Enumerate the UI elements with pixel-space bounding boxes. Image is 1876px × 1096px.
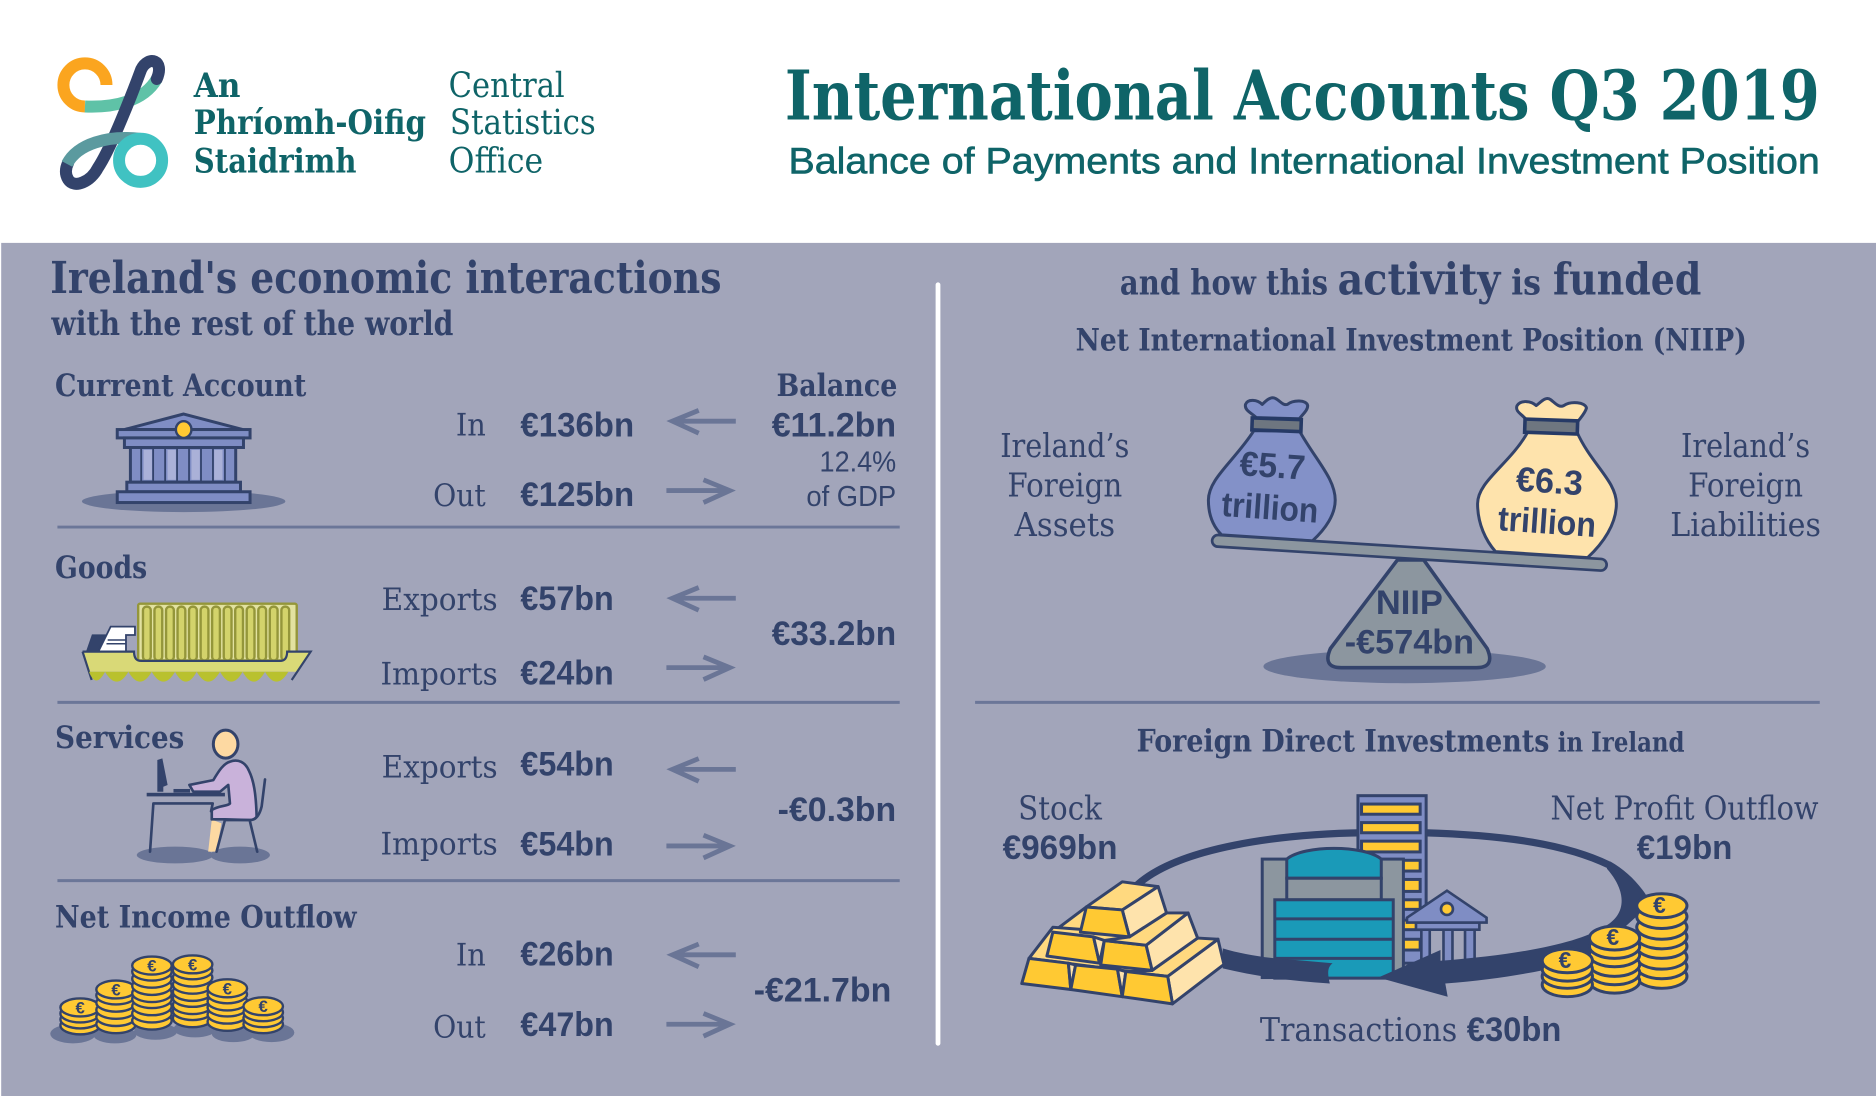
flow: imports: €54bn <box>520 826 614 864</box>
scale shadow <box>1263 650 1546 683</box>
icon: liabilities money bag <box>1478 399 1616 558</box>
flow: exports: Exports <box>382 750 498 786</box>
logo text: English name: Central <box>449 66 565 106</box>
icon: coin stacks: € <box>75 998 85 1017</box>
icon: container ship <box>83 604 311 682</box>
flow: exports <box>382 745 736 786</box>
flow: exports: Exports <box>382 582 498 618</box>
icon: tower <box>1358 796 1426 963</box>
flow: out: €125bn <box>520 476 634 514</box>
logo text: English name: Statistics <box>450 103 596 143</box>
heading: left panel: with the rest of the world <box>51 304 453 343</box>
flow: out: Out <box>433 478 486 514</box>
balance value: 12.4% <box>820 446 896 478</box>
balance value: of GDP <box>806 481 896 513</box>
icon: coin stacks: € <box>188 955 198 974</box>
label: foreign assets: Ireland’s <box>1000 427 1129 465</box>
icon: assets money bag: €5.7 <box>1238 445 1307 488</box>
ring arrow top <box>1137 833 1609 885</box>
icon: coin stacks: € <box>147 957 157 976</box>
balance value: €33.2bn <box>772 615 896 653</box>
icon: fulcrum with NIIP <box>1328 560 1490 668</box>
panel: services <box>55 720 896 864</box>
icon: knot mark <box>63 61 162 184</box>
heading: right panel: and how this <box>1120 262 1328 303</box>
icon: bank <box>82 414 285 512</box>
icon: coin stacks: € <box>223 979 233 998</box>
balance value: -€21.7bn <box>754 971 891 1009</box>
flow: out <box>433 1006 730 1045</box>
label: transactions: Transactions <box>1260 1011 1457 1049</box>
logo text: Irish name: Staidrimh <box>194 141 357 180</box>
icon: fulcrum with NIIP: NIIP <box>1376 584 1443 622</box>
flow: exports <box>382 580 736 618</box>
panel: net income outflow <box>50 899 891 1045</box>
icon: main building <box>1262 848 1403 978</box>
icon: liabilities money bag: trillion <box>1497 500 1597 545</box>
logo: Central Statistics Office <box>63 61 596 184</box>
balance value <box>772 407 896 513</box>
balance value: -€0.3bn <box>778 791 896 829</box>
panel: current account <box>55 368 897 514</box>
flow: in: In <box>456 408 486 444</box>
icon: coin stacks: € <box>259 997 269 1016</box>
flow: in <box>456 407 736 445</box>
label: foreign liabilities: Liabilities <box>1670 506 1821 544</box>
chart: FDI cycle <box>1022 796 1687 1004</box>
heading: current account: Current Account <box>55 368 307 404</box>
logo text: English name: Office <box>449 141 543 181</box>
heading: goods: Goods <box>55 550 147 586</box>
arrow: tail <box>1223 948 1333 984</box>
flow: imports: Imports <box>380 656 498 692</box>
heading: balance: Balance <box>776 368 897 404</box>
icon: liabilities money bag: €6.3 <box>1515 461 1584 503</box>
logo text: Irish name: Phríomh-Oifig <box>194 103 426 142</box>
flow: out: €47bn <box>520 1006 614 1044</box>
logo text: Irish name: An <box>193 66 240 105</box>
label: foreign assets: Foreign <box>1007 467 1122 505</box>
logo text: Irish name <box>193 66 426 180</box>
label: foreign assets: Assets <box>1014 506 1115 544</box>
icon: coin stacks <box>1542 892 1687 997</box>
heading: left panel <box>50 252 721 343</box>
heading: NIIP: Net International Investment Position (NIIP) <box>1076 323 1747 359</box>
icon: coin stacks: € <box>111 980 121 999</box>
icon: small bank <box>1407 891 1487 963</box>
heading: net income outflow: Net Income Outflow <box>55 899 358 935</box>
heading: right panel <box>1120 253 1701 305</box>
label: foreign liabilities: Ireland’s <box>1681 427 1810 465</box>
logo text: English name <box>449 66 596 181</box>
label: net profit outflow: €19bn <box>1637 829 1732 867</box>
balance value: €11.2bn <box>772 407 896 445</box>
flow: exports: €54bn <box>520 745 614 783</box>
heading: right panel: activity <box>1338 253 1501 305</box>
heading: right panel: is <box>1511 262 1541 303</box>
flow: out: Out <box>433 1009 486 1045</box>
icon: fulcrum with NIIP: -€574bn <box>1345 623 1474 661</box>
label: transactions: €30bn <box>1467 1011 1561 1049</box>
flow: in: In <box>456 938 486 974</box>
icon: coin stacks: € <box>1606 924 1619 950</box>
label: foreign liabilities <box>1670 427 1821 544</box>
heading: right panel: funded <box>1553 253 1701 305</box>
heading: left panel: Ireland's economic interactions <box>50 252 721 304</box>
vertical divider <box>936 285 940 1043</box>
icon: coin stacks <box>50 955 294 1043</box>
heading: foreign direct investments: in Ireland <box>1558 726 1685 758</box>
flow: in <box>456 936 736 974</box>
panel: goods <box>55 550 896 692</box>
flow: imports <box>380 654 730 692</box>
label: foreign liabilities: Foreign <box>1688 467 1803 505</box>
flow: imports: €24bn <box>520 654 614 692</box>
icon: coin stacks: € <box>1653 892 1666 918</box>
flow: in: €26bn <box>520 936 614 974</box>
icon: assets money bag: trillion <box>1220 486 1320 531</box>
icon: scale beam <box>1218 541 1601 565</box>
icon: coin stacks: € <box>1559 947 1572 973</box>
label: net profit outflow: Net Profit Outflow <box>1551 790 1819 828</box>
chart: NIIP balance scale <box>1208 398 1616 683</box>
label: foreign assets <box>1000 427 1129 544</box>
icon: gold bars <box>1022 882 1224 1004</box>
label: stock: Stock <box>1018 790 1102 828</box>
flow: imports: Imports <box>380 826 498 862</box>
flow: in: €136bn <box>520 407 634 445</box>
icon: assets money bag <box>1208 398 1335 541</box>
label: net profit outflow <box>1551 790 1819 867</box>
heading: services: Services <box>55 720 184 756</box>
flow: imports <box>380 826 730 864</box>
flow: exports: €57bn <box>520 580 614 618</box>
icon: person at desk <box>137 730 270 863</box>
flow: out <box>433 476 730 514</box>
subtitle: Balance of Payments and International Investment Position <box>788 139 1820 181</box>
heading: foreign direct investments: Foreign Direct Investments <box>1137 723 1549 759</box>
label: stock <box>1003 790 1117 867</box>
label: stock: €969bn <box>1003 829 1117 867</box>
arrow: thick return arrow <box>1378 861 1651 997</box>
